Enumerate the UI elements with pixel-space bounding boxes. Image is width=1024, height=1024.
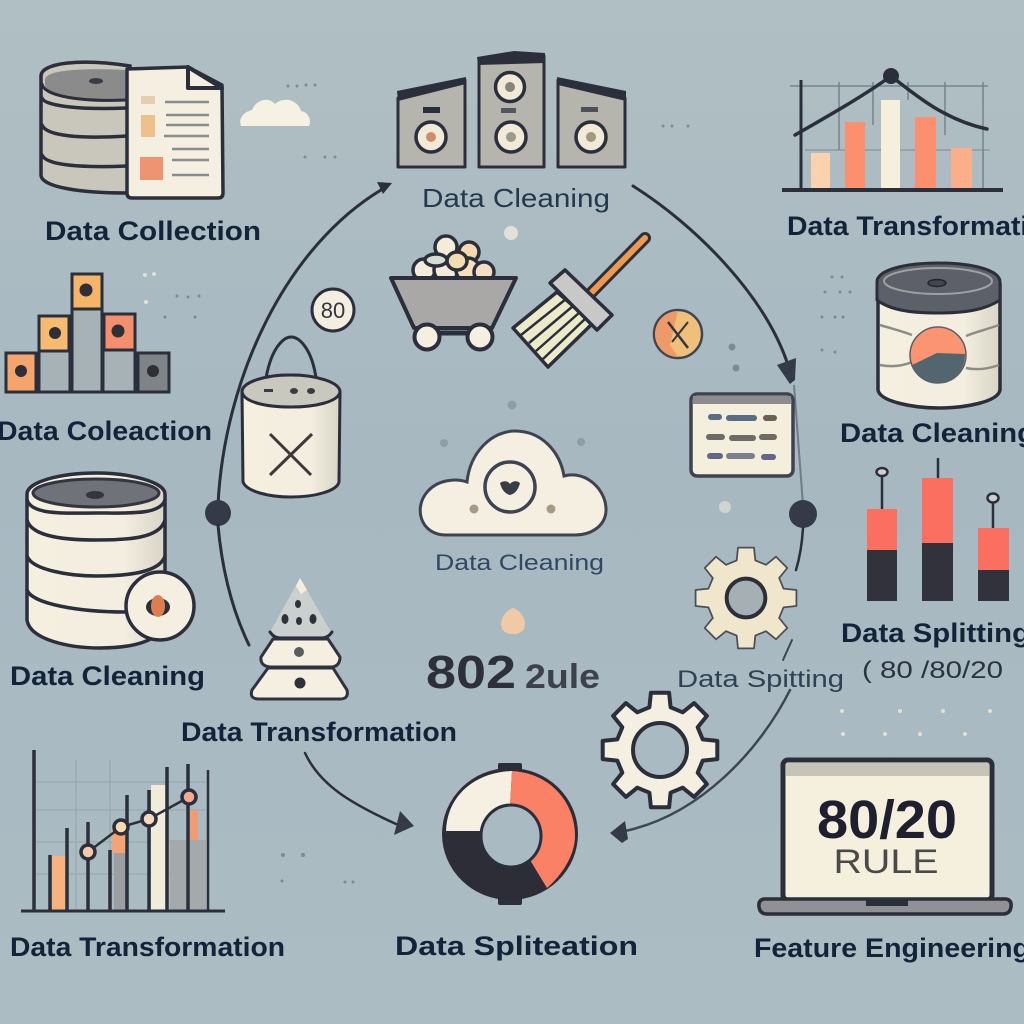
label: Data Cleaning center: Data Cleaning	[435, 550, 604, 575]
icon: database with document	[41, 62, 223, 198]
icon: peach drop	[501, 608, 525, 634]
label: Data Cleaning right: Data Cleaning	[840, 418, 1024, 448]
cycle arrows	[205, 182, 817, 843]
icon: circled cross	[654, 310, 702, 358]
icon: large gear	[603, 693, 717, 807]
callout: 80 badge: 80	[321, 298, 345, 323]
icon: stepped blocks	[6, 274, 169, 392]
icon: laptop 80/20 rule	[759, 760, 1011, 914]
label: 802 2ule: 802	[426, 646, 516, 698]
label: Data Splitting: Data Splitting	[841, 618, 1024, 648]
icon: mine cart	[391, 236, 516, 350]
label: Data Collection: Data Collection	[45, 216, 261, 246]
icon: donut chart	[442, 763, 578, 905]
icon: table card	[691, 394, 793, 476]
label: Feature Engineering: Feature Engineering	[754, 933, 1024, 963]
icon: brush	[513, 238, 645, 367]
label: Data Splitteation: Data Spliteation	[395, 931, 638, 961]
icon: bar and curve chart	[782, 68, 1003, 190]
icon: canister with pie	[877, 263, 1000, 408]
label: Data Coleaction: Data Coleaction	[0, 416, 212, 446]
icon: server towers	[397, 51, 626, 167]
icon: laptop 80/20 rule: RULE	[834, 843, 938, 881]
icon: pyramid	[251, 578, 347, 699]
icon: small gear	[696, 548, 796, 648]
label: Data Transformation middle: Data Transformation	[181, 717, 457, 747]
icon: laptop 80/20 rule: 80/20	[817, 790, 957, 850]
icon: split bar chart	[867, 458, 1009, 601]
icon: small cloud	[240, 100, 310, 126]
label: Data Transformation bottom left: Data Transformation	[10, 932, 285, 962]
icon: central cloud	[420, 400, 606, 535]
label: Data Cleaning left: Data Cleaning	[10, 661, 205, 691]
icon: database with badge	[27, 473, 194, 648]
label: 802 2ule: 2ule	[525, 658, 600, 696]
label: 80/80/20 ratio: ( 80 /80/20	[862, 657, 1003, 684]
icon: line and bar chart	[21, 750, 225, 911]
icon: bucket with cross	[242, 337, 340, 497]
callout: 80 badge	[312, 289, 354, 331]
decorative specks	[164, 84, 852, 884]
label: Data Cleaning top: Data Cleaning	[422, 183, 610, 213]
label: Data Spitting: Data Spitting	[677, 666, 844, 693]
decorative dots	[143, 226, 992, 736]
